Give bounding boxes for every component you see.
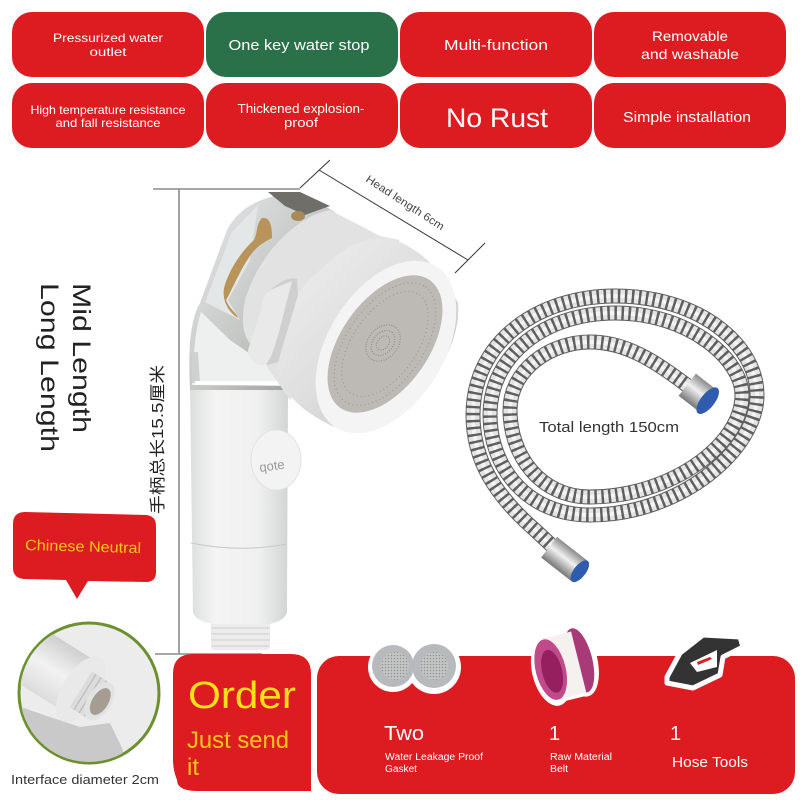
badge: no rust: No Rust [446,103,549,133]
vertical label: handle length: 手柄总长15.5厘米 [149,365,167,514]
badge: thickened explosion-proof [206,83,398,148]
badge: multi-function [400,12,592,77]
caption: interface diameter: Interface diameter 2cm [11,772,159,787]
item: gasket text: Two [384,723,424,745]
label: hose total length: Total length 150cm [539,419,679,436]
item: tool text: 1 [670,723,681,745]
vertical labels: mid and long length: Mid Length [67,283,95,433]
item: tool text: Hose Tools [672,755,748,771]
icon: raw material belt [523,620,606,710]
hose fitting: top end [677,372,723,418]
label: head length: Head length 6cm [363,173,446,233]
dimension lines [153,160,485,654]
metal hose [473,296,757,585]
badge: removable and washable [594,12,786,77]
badge: multi-function: Multi-function [444,37,548,54]
panel: order [173,654,311,791]
panel: order: it [187,754,199,781]
top feature badges [12,12,786,148]
badge: removable and washable: Removable [652,28,728,44]
panel: order: Order [188,675,296,717]
item: belt text: Belt [550,764,568,775]
badge: one key water stop: One key water stop [228,37,370,54]
badge: simple installation [594,83,786,148]
hose fitting: bottom end [541,537,593,585]
badge: no rust [400,83,592,148]
badge: thickened explosion-proof: Thickened explosion- [238,101,364,116]
lower handle [190,388,288,624]
inset: interface close-up [18,622,160,764]
item: belt text: Raw Material [550,752,612,763]
badge: pressurized water outlet: outlet [90,45,127,59]
shower head product [189,192,486,650]
panel: order: Just send [187,727,289,754]
badge: high temperature resistance [12,83,204,148]
thread [211,612,270,650]
item: gasket text: Gasket [385,764,417,775]
badge: pressurized water outlet: Pressurized water [53,31,163,45]
callout: Chinese neutral: Chinese Neutral [25,537,141,557]
stop button: qote [258,457,285,475]
icon: hose tool [667,635,743,688]
brass valve detail [224,218,272,318]
item: belt text: 1 [549,723,560,745]
badge: high temperature resistance: High temperature resistance [30,103,186,117]
badge: pressurized water outlet [12,12,204,77]
icon: gaskets [368,640,461,694]
vertical labels: mid and long length [35,283,95,452]
vertical labels: mid and long length: Long Length [35,283,63,452]
callout: Chinese neutral [13,512,156,599]
item: belt text [549,723,612,775]
badge: removable and washable: and washable [641,46,739,62]
item: gasket text: Water Leakage Proof [385,752,483,763]
transparent elbow [189,192,335,390]
item: gasket text [384,723,483,775]
badge: one key water stop [206,12,398,77]
badge: high temperature resistance: and fall resistance [56,116,161,130]
panel: included accessories [317,620,795,794]
head body [243,210,486,458]
mode switch slider [248,278,298,365]
badge: thickened explosion-proof: proof [284,115,318,130]
badge: simple installation: Simple installation [623,110,751,126]
item: tool text [670,723,748,771]
stop button [251,430,301,490]
